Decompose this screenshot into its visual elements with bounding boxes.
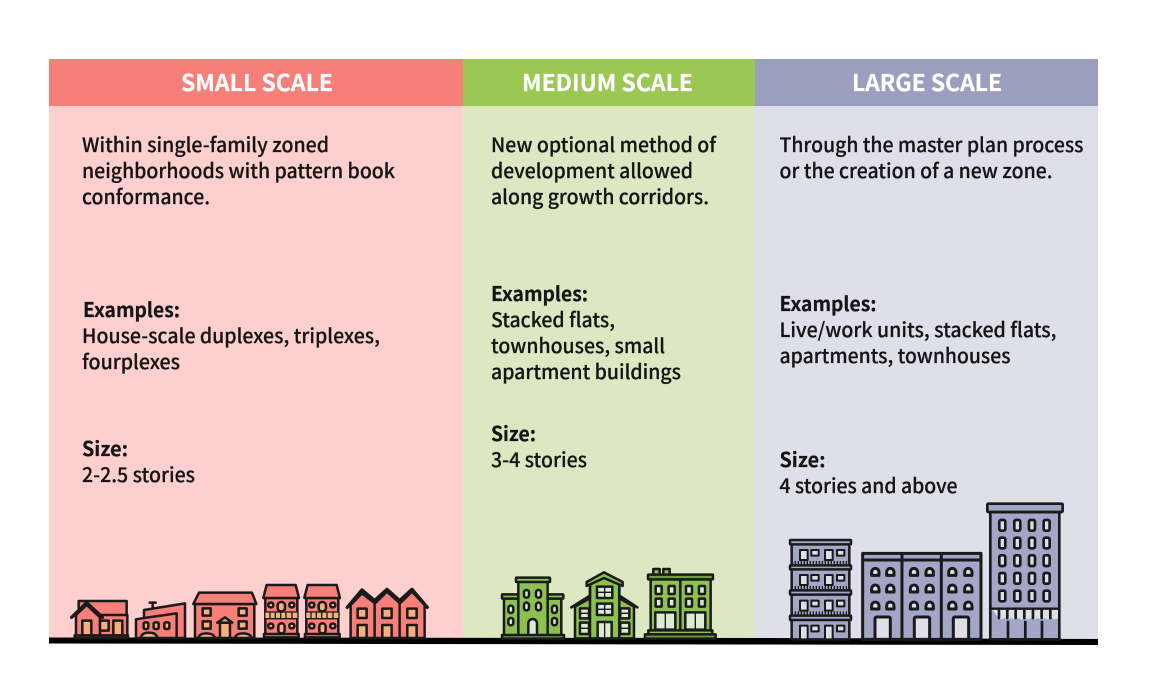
text: large scale examples: apartments, townhouses <box>780 340 1010 369</box>
icon: arched apartment <box>502 578 564 639</box>
heading: small scale: SMALL SCALE <box>181 64 333 98</box>
icon: row of gabled houses <box>347 589 427 638</box>
text: small scale size: 2-2.5 stories <box>82 459 195 488</box>
text: small scale examples <box>82 294 380 375</box>
icon: three-bay apartment <box>863 553 981 639</box>
text: small scale description <box>82 129 395 210</box>
heading: medium scale: MEDIUM SCALE <box>522 64 693 98</box>
icon: townhouse right <box>304 585 340 637</box>
text: large scale description: or the creation of a new zone. <box>780 155 1052 184</box>
text: large scale description: Through the master plan process <box>780 129 1084 158</box>
text: medium scale size <box>491 418 587 473</box>
heading: small scale <box>49 59 463 106</box>
text: large scale description <box>780 129 1084 184</box>
text: medium scale description: development allowed <box>491 155 693 184</box>
icon: tower with awning <box>987 504 1063 639</box>
text: large scale examples: Live/work units, stacked flats, <box>780 314 1056 343</box>
panel: large scale <box>755 59 1098 641</box>
text: medium scale examples: apartment buildings <box>491 356 681 385</box>
ground line <box>49 638 1098 645</box>
icon: small scale houses <box>72 585 427 638</box>
text: medium scale examples <box>491 278 681 385</box>
text: medium scale description <box>491 129 717 210</box>
text: large scale size: 4 stories and above <box>780 470 958 499</box>
text: small scale size <box>82 433 195 488</box>
heading: large scale: LARGE SCALE <box>852 64 1002 98</box>
icon: townhouse left <box>263 585 299 637</box>
panel: small scale <box>49 59 463 641</box>
icon: house with gable <box>72 601 128 638</box>
text: large scale examples <box>780 288 1056 369</box>
text: medium scale examples: Examples: <box>491 278 588 307</box>
heading: medium scale <box>463 59 755 106</box>
heading: large scale <box>755 59 1098 106</box>
text: small scale description: neighborhoods with pattern book <box>82 155 395 184</box>
icon: medium scale buildings <box>502 569 716 639</box>
text: small scale examples: Examples: <box>83 294 180 323</box>
text: large scale size <box>780 444 958 499</box>
text: medium scale size: 3-4 stories <box>491 444 587 473</box>
text: medium scale size: Size: <box>491 418 536 447</box>
text: small scale description: conformance. <box>82 181 210 210</box>
icon: duplex <box>193 593 256 638</box>
icon: brick apartment <box>645 569 716 639</box>
text: medium scale description: along growth corridors. <box>491 181 709 210</box>
icon: balcony apartment <box>790 540 851 639</box>
text: medium scale description: New optional method of <box>491 129 717 158</box>
icon: gabled apartment <box>571 572 637 638</box>
text: small scale description: Within single-family zoned <box>82 129 329 158</box>
icon: large scale buildings <box>790 504 1063 639</box>
text: medium scale examples: Stacked flats, <box>491 304 615 333</box>
text: large scale examples: Examples: <box>780 288 876 317</box>
panel: medium scale <box>463 59 755 641</box>
text: small scale examples: fourplexes <box>82 346 180 375</box>
text: small scale size: Size: <box>82 433 128 462</box>
text: medium scale examples: townhouses, small <box>491 330 665 359</box>
text: large scale size: Size: <box>780 444 826 473</box>
text: small scale examples: House-scale duplexes, triplexes, <box>82 320 380 349</box>
icon: modern house <box>136 603 185 638</box>
